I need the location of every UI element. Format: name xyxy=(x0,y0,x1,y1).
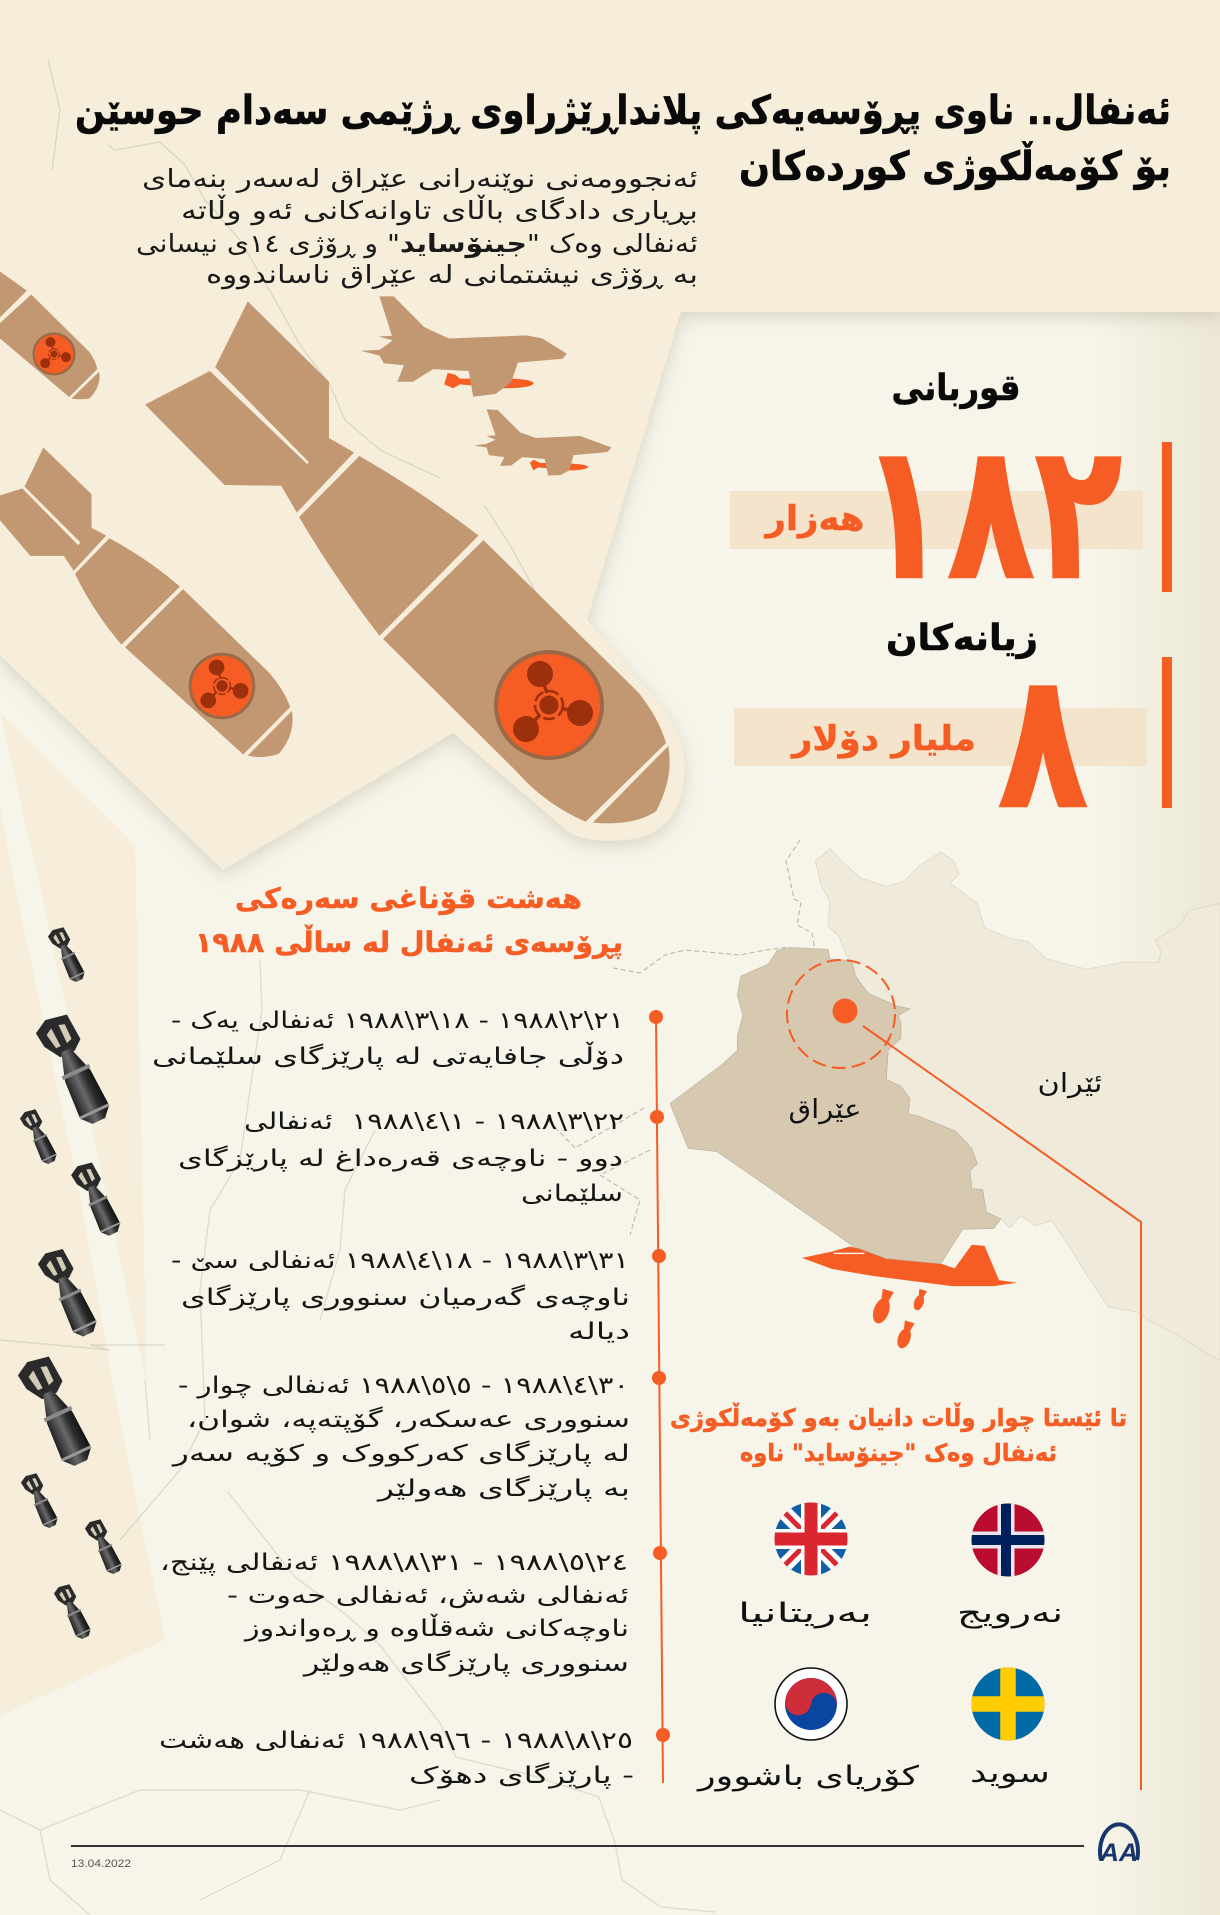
black bomb 7 xyxy=(19,1471,61,1531)
icon: large fighter plane xyxy=(361,296,567,397)
flag: Sweden xyxy=(972,1668,1044,1740)
map label: Iran: ئێران xyxy=(1038,1069,1102,1099)
logo: AA agency: AA xyxy=(1099,1839,1138,1867)
accent bar xyxy=(1162,657,1172,808)
countries heading: ئەنفال وەک "جینۆساید" ناوە xyxy=(740,1439,1057,1467)
small chemical bomb xyxy=(0,271,100,399)
heading: damages: زیانەکان xyxy=(886,618,1038,659)
logo: AA agency xyxy=(1099,1824,1138,1867)
panel: casualties statistic xyxy=(730,368,1172,622)
panel: top header background xyxy=(0,0,1220,870)
heading: victims: قوربانی xyxy=(892,368,1020,409)
flag: United Kingdom xyxy=(774,1502,848,1576)
timeline entry 5: ٢٤\٥\١٩٨٨ - ٣١\٨\١٩٨٨ ئەنفالی پێنج، xyxy=(160,1550,628,1576)
country label: Sweden: سوید xyxy=(970,1758,1050,1789)
timeline entry 1: دۆڵی جافایەتی لە پارێزگای سلێمانی xyxy=(152,1041,624,1070)
icon: hazard emblem medium xyxy=(190,654,254,718)
medium chemical bomb xyxy=(0,448,293,757)
intro paragraph: بڕیاری دادگای باڵای تاوانەکانی ئەو وڵاتە xyxy=(181,194,698,226)
timeline entry 2 xyxy=(178,1109,624,1207)
timeline heading: هەشت قۆناغی سەرەکی xyxy=(235,882,582,915)
timeline entry 1 xyxy=(152,1008,624,1070)
timeline entry 5: سنووری پارێزگای هەولێر xyxy=(303,1650,629,1677)
unit: billion dollars: ملیار دۆلار xyxy=(790,719,976,759)
countries heading: تا ئێستا چوار وڵات دانیان بەو کۆمەڵکوژی xyxy=(670,1402,1127,1432)
timeline entry 6: ٢٥\٨\١٩٨٨ - ٦\٩\١٩٨٨ ئەنفالی هەشت xyxy=(159,1728,633,1754)
intro paragraph xyxy=(136,164,698,290)
icon: falling orange bombs xyxy=(870,1288,928,1350)
black bomb 2 xyxy=(33,1010,115,1129)
timeline entry 2: ٢٢\٣\١٩٨٨ - ١\٤\١٩٨٨ ئەنفالی xyxy=(244,1109,624,1135)
title: بۆ کۆمەڵکوژی کوردەکان xyxy=(739,141,1171,190)
dashed regional borders xyxy=(548,840,815,1235)
timeline entry 1: ٢١\٢\١٩٨٨ - ١٨\٣\١٩٨٨ ئەنفالی یەک - xyxy=(171,1008,624,1034)
timeline entry 2: دوو - ناوچەی قەرەداغ لە پارێزگای xyxy=(178,1145,623,1172)
black bomb 6 xyxy=(15,1352,97,1471)
map label: Iraq: عێراق xyxy=(788,1095,862,1125)
highlight band xyxy=(730,491,1143,549)
timeline entry 5: ئەنفالی شەش، ئەنفالی حەوت - xyxy=(227,1583,629,1609)
timeline entry 4: ٣٠\٤\١٩٨٨ - ٥\٥\١٩٨٨ ئەنفالی چوار - xyxy=(178,1373,629,1399)
black bomb 8 xyxy=(83,1517,125,1577)
timeline entry 4: لە پارێزگای کەرکووک و کۆیە سەر xyxy=(172,1440,630,1467)
icon: hazard emblem big xyxy=(496,652,602,758)
intro paragraph: ئەنفالی وەک "جینۆساید" و ڕۆژی ١٤ی نیسانی xyxy=(136,229,698,259)
footer date: 13.04.2022 xyxy=(71,1858,131,1870)
panel: bomb illustration group xyxy=(0,271,670,823)
accent bar xyxy=(1162,442,1172,592)
map marker and leader line xyxy=(787,960,1141,1790)
Iraq shape xyxy=(670,947,1001,1264)
highlight band xyxy=(734,708,1147,766)
map: Iran xyxy=(815,849,1220,1360)
icon: small fighter plane xyxy=(474,409,612,475)
timeline entry 3: ٣١\٣\١٩٨٨ - ١٨\٤\١٩٨٨ ئەنفالی سێ - xyxy=(171,1248,629,1274)
flag: South Korea xyxy=(775,1668,847,1740)
timeline entry 6: - پارێزگای دهۆک xyxy=(409,1762,634,1789)
timeline entry 2: سلێمانی xyxy=(521,1181,623,1207)
timeline axis and dots xyxy=(649,1010,670,1783)
icon: hazard emblem small xyxy=(34,334,74,374)
timeline entry 4 xyxy=(172,1373,630,1502)
black bomb 3 xyxy=(18,1107,60,1167)
timeline entry 5: ناوچەکانی شەقڵاوە و ڕەواندوز xyxy=(244,1613,629,1642)
unit: thousand: هەزار xyxy=(763,499,864,539)
timeline heading: پڕۆسەی ئەنفال لە ساڵی ١٩٨٨ xyxy=(195,925,623,959)
black bomb 5 xyxy=(35,1245,101,1341)
intro paragraph: ئەنجوومەنی نوێنەرانی عێراق لەسەر بنەمای xyxy=(142,164,698,194)
timeline entry 3: دیالە xyxy=(568,1319,630,1345)
intro paragraph: بە ڕۆژی نیشتمانی لە عێراق ناساندووە xyxy=(206,260,698,290)
black bomb 1 xyxy=(46,925,88,985)
icon: orange bomber plane xyxy=(802,1245,1017,1286)
country label: Britain: بەریتانیا xyxy=(738,1598,872,1629)
timeline entry 4: سنووری عەسکەر، گۆپتەپە، شوان، xyxy=(187,1406,630,1433)
flag: Norway xyxy=(972,1504,1044,1576)
country label: Norway: نەرویج xyxy=(957,1598,1063,1629)
panel: lower left strip xyxy=(0,712,165,1716)
countries heading xyxy=(670,1402,1127,1467)
black bomb 9 xyxy=(52,1582,94,1642)
number 182: ١٨٢ xyxy=(860,403,1122,622)
number 8: ٨ xyxy=(998,632,1088,851)
title xyxy=(75,88,1171,190)
panel: damages statistic xyxy=(734,618,1172,851)
timeline entry 3 xyxy=(171,1248,630,1345)
timeline entry 3: ناوچەی گەرمیان سنووری پارێزگای xyxy=(181,1284,630,1311)
black bomb 4 xyxy=(69,1159,124,1239)
map: Iraq with plane xyxy=(670,947,1017,1350)
footer rule xyxy=(71,1845,1084,1847)
timeline entry 6 xyxy=(159,1728,634,1789)
country label: South Korea: کۆریای باشوور xyxy=(695,1761,919,1792)
big chemical bomb xyxy=(145,301,670,823)
wall cracks xyxy=(0,60,715,1915)
timeline entry 5 xyxy=(160,1550,629,1677)
timeline heading xyxy=(195,882,623,959)
timeline entry 4: بە پارێزگای هەولێر xyxy=(377,1475,630,1502)
decorative black bombs column xyxy=(15,925,125,1642)
